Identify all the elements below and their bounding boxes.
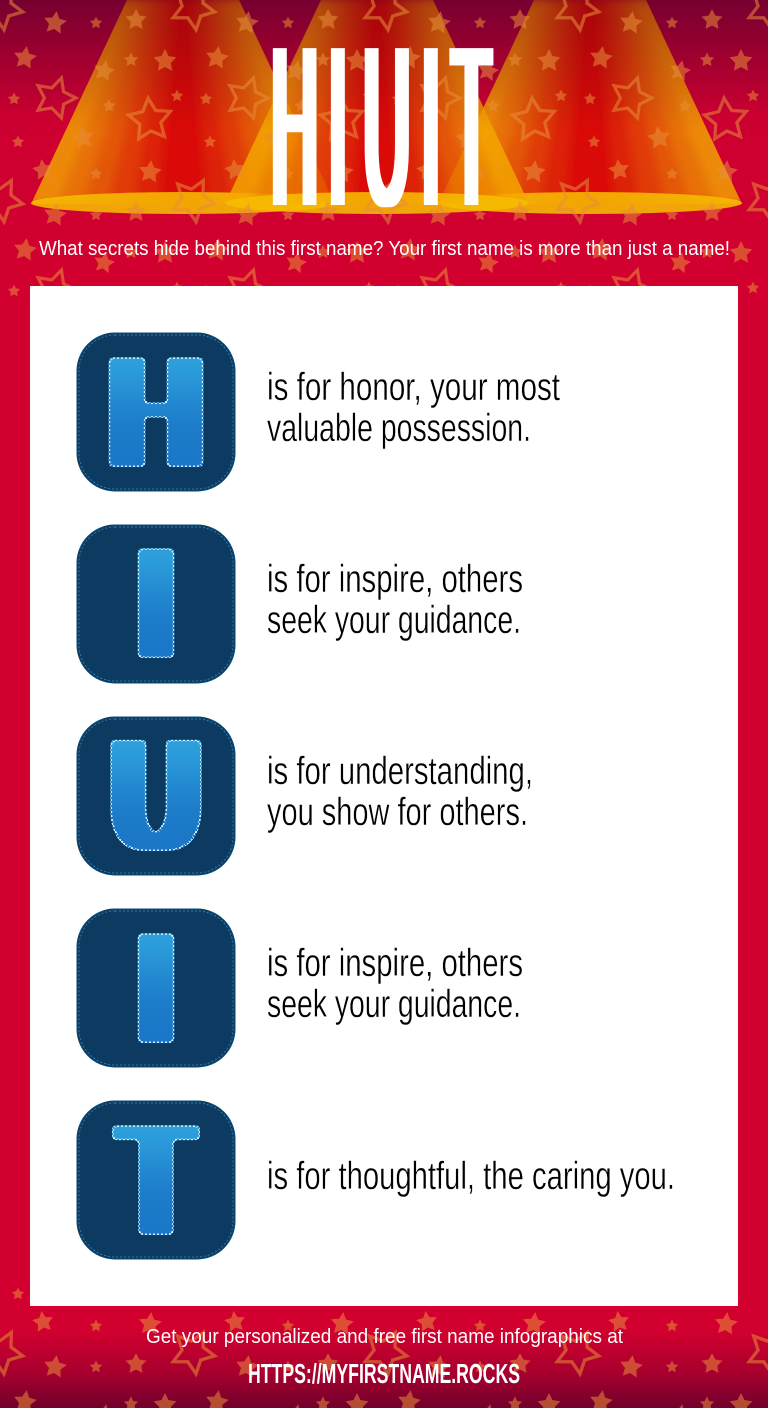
- text: I meaning: [267, 558, 523, 642]
- icon: letter H tile: H: [111, 326, 201, 498]
- text: U meaning: is for understanding,: [267, 750, 533, 793]
- star pattern: top: [0, 0, 768, 299]
- star pattern: lone margin star above footer: [0, 1287, 30, 1306]
- row: I second: [77, 902, 523, 1074]
- footer url: HTTPS://MYFIRSTNAME.ROCKS: [248, 1358, 520, 1389]
- panel: white content card: [30, 286, 738, 1306]
- icon: letter I tile: I: [139, 902, 173, 1074]
- text: U meaning: you show for others.: [267, 791, 528, 834]
- footer prompt: Get your personalized and free first name infographics at: [146, 1326, 623, 1348]
- row: I: [77, 516, 523, 690]
- row: U: [77, 708, 533, 881]
- spotlight: right: [400, 0, 768, 214]
- spotlight: centre: [187, 0, 567, 214]
- icon: letter I tile: I: [139, 516, 173, 690]
- text: I meaning: is for inspire, others: [267, 942, 523, 985]
- text: H meaning: valuable possession.: [267, 407, 531, 450]
- icon: letter T tile: [77, 1094, 235, 1266]
- icon: letter U tile: U: [114, 708, 198, 881]
- text: I meaning: seek your guidance.: [267, 599, 521, 642]
- spotlight: left: [0, 0, 373, 214]
- text: U meaning: [267, 750, 533, 834]
- subtitle: What secrets hide behind this first name? Your first name is more than just a name!: [39, 238, 730, 260]
- text: H meaning: [267, 366, 560, 450]
- row: T: [77, 1094, 675, 1266]
- row: H: [77, 326, 560, 498]
- icon: letter T tile: T: [122, 1094, 190, 1266]
- text: I meaning: is for inspire, others: [267, 558, 523, 601]
- star pattern: bottom: [0, 1306, 768, 1408]
- icon: letter I tile: [77, 902, 235, 1074]
- text: H meaning: is for honor, your most: [267, 366, 560, 409]
- icon: letter I tile: [77, 516, 235, 690]
- text: I meaning: [267, 942, 523, 1026]
- title: HIUIT: [272, 0, 491, 254]
- text: I meaning: seek your guidance.: [267, 983, 521, 1026]
